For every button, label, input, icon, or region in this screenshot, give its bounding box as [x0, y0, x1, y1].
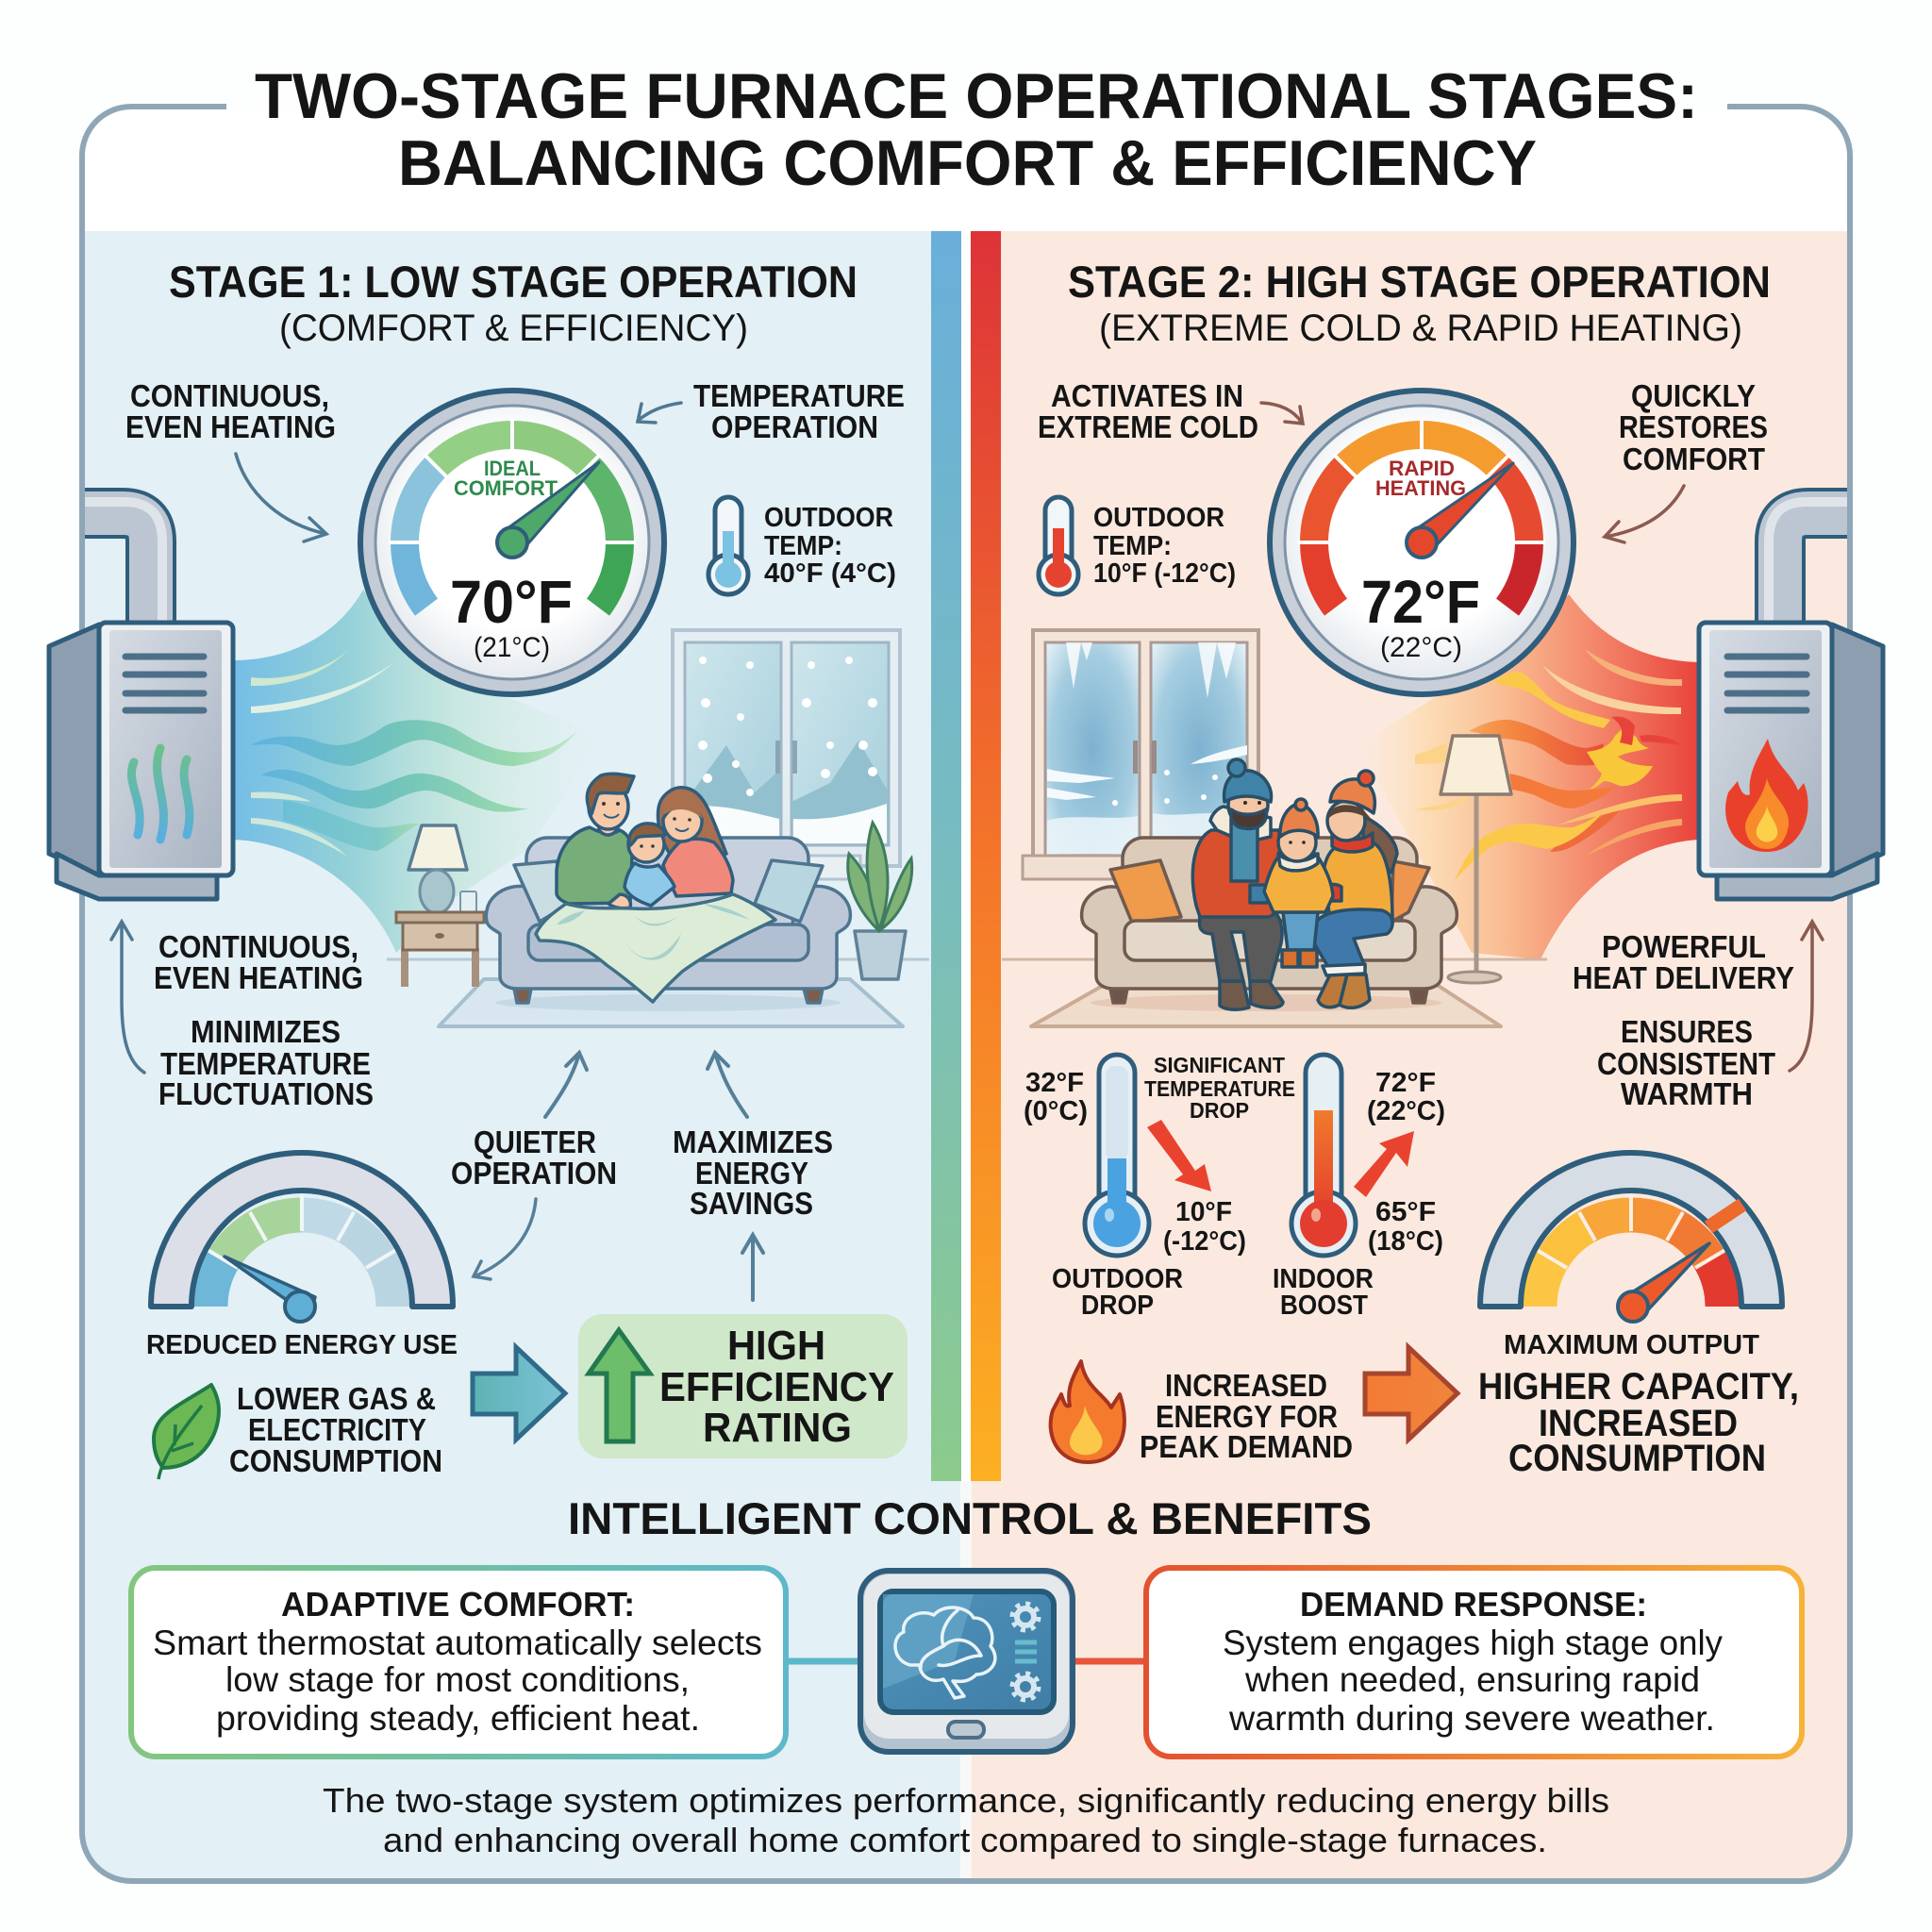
arrow to gauge from label — [236, 454, 326, 541]
connector left — [789, 1658, 858, 1664]
family left — [557, 774, 733, 908]
label: 10F: (-12°C) — [1163, 1226, 1246, 1257]
label: lower gas and electricity: CONSUMPTION — [229, 1443, 442, 1478]
high efficiency rating box: RATING — [703, 1405, 852, 1451]
high efficiency rating box: HIGH — [727, 1323, 825, 1369]
label: outdoor temp 40F: TEMP: — [764, 531, 842, 561]
comfort gauge 70F — [360, 391, 664, 694]
stage 2 heading: (EXTREME COLD & RAPID HEATING) — [1099, 308, 1742, 349]
icon: leaf — [154, 1385, 219, 1479]
thermometer outdoor drop — [1085, 1055, 1149, 1256]
high efficiency rating box: EFFICIENCY — [659, 1364, 894, 1410]
arrow quieter to room — [545, 1053, 587, 1117]
label: temperature operation — [693, 378, 905, 444]
label: higher capacity increased consumption: CONSUMPTION — [1508, 1438, 1766, 1479]
flame swirl — [1587, 717, 1682, 790]
label: maximizes energy savings — [673, 1124, 833, 1221]
panel: stage 2 high stage — [1002, 257, 1883, 1479]
label: outdoor temp 40F: 40°F (4°C) — [764, 558, 896, 589]
label: outdoor temp 10F: OUTDOOR — [1093, 503, 1224, 533]
arrow quieter to gauge — [474, 1199, 536, 1279]
stage 1 heading: STAGE 1: LOW STAGE OPERATION — [169, 257, 858, 307]
gear icons and bars — [1012, 1604, 1039, 1700]
label: lower gas and electricity — [229, 1381, 442, 1478]
connector right — [1074, 1658, 1144, 1664]
label: significant temperature drop: TEMPERATURE — [1144, 1076, 1295, 1101]
label: continuous even heating top: CONTINUOUS, — [130, 378, 329, 413]
label: significant temperature drop: DROP — [1190, 1098, 1249, 1123]
icon: smart thermostat tablet — [860, 1571, 1073, 1752]
stage 2 heading — [1068, 257, 1771, 349]
label: continuous even heating lower: CONTINUOUS, — [158, 929, 358, 964]
label: higher capacity increased consumption: HIGHER CAPACITY, — [1478, 1366, 1799, 1407]
icon: duct left — [85, 502, 162, 625]
panel: adaptive comfort: providing steady, efficient heat. — [216, 1699, 700, 1738]
comfort gauge 70F: (21°C) — [474, 632, 550, 663]
label: significant temperature drop: SIGNIFICANT — [1154, 1053, 1285, 1077]
arrow rating to savings — [742, 1235, 763, 1300]
label: outdoor temp 40F — [764, 503, 896, 589]
icon: duct right — [1769, 502, 1847, 625]
label: increased energy for peak demand — [1140, 1368, 1353, 1464]
label: maximum output: MAXIMUM OUTPUT — [1504, 1330, 1759, 1360]
energy gauge low — [151, 1153, 453, 1322]
panel: demand response: when needed, ensuring rapid — [1244, 1660, 1700, 1699]
label: significant temperature drop — [1144, 1053, 1295, 1123]
label: quickly restores comfort: RESTORES — [1619, 409, 1768, 444]
thermometer indoor boost — [1291, 1055, 1356, 1256]
label: quieter operation: OPERATION — [451, 1156, 617, 1191]
panel: adaptive comfort: Smart thermostat automatically selects — [153, 1624, 762, 1662]
comfort gauge 70F: 70°F — [450, 568, 573, 636]
plant — [848, 823, 912, 979]
comfort gauge 70F: IDEAL — [484, 457, 541, 480]
brain icon — [895, 1607, 995, 1698]
label: minimizes temperature fluctuations: TEMPERATURE — [160, 1046, 371, 1081]
label: outdoor drop — [1052, 1264, 1183, 1321]
icon: furnace right — [1699, 623, 1883, 899]
label: maximizes energy savings: ENERGY — [695, 1156, 808, 1191]
label: ensures consistent warmth: WARMTH — [1621, 1076, 1753, 1111]
title: BALANCING COMFORT & EFFICIENCY — [398, 127, 1537, 199]
label: increased energy for peak demand: PEAK DEMAND — [1140, 1429, 1353, 1464]
thermometer small outdoor — [708, 497, 748, 594]
label: activates in extreme cold — [1038, 378, 1258, 444]
label: outdoor drop: OUTDOOR — [1052, 1264, 1183, 1294]
closing summary text — [323, 1781, 1609, 1859]
label: 10F — [1163, 1197, 1246, 1257]
high efficiency rating box — [578, 1314, 908, 1458]
comfort gauge 70F: COMFORT — [454, 476, 558, 500]
label: 65F: (18°C) — [1368, 1226, 1443, 1257]
label: ensures consistent warmth — [1597, 1014, 1775, 1111]
mother in winter wear — [1313, 771, 1397, 1008]
arrow savings to room — [708, 1053, 747, 1117]
heating gauge 72F: RAPID — [1389, 457, 1455, 480]
label: 65F: 65°F — [1375, 1197, 1436, 1227]
floor and rug right — [1002, 959, 1547, 1026]
label: powerful heat delivery: POWERFUL — [1602, 929, 1766, 964]
arrow to gauge activates — [1261, 403, 1303, 424]
label: quickly restores comfort — [1619, 378, 1768, 476]
label: 10F: 10°F — [1175, 1197, 1232, 1227]
blanket — [536, 894, 775, 1002]
block arrow right — [1365, 1347, 1457, 1440]
label: 32F — [1024, 1068, 1088, 1126]
panel: adaptive comfort — [131, 1568, 786, 1757]
label: outdoor temp 10F — [1093, 503, 1236, 589]
heading: intelligent control: INTELLIGENT CONTROL & BENEFITS — [568, 1493, 1372, 1543]
label: 32F: 32°F — [1025, 1068, 1084, 1098]
label: higher capacity increased consumption — [1478, 1366, 1799, 1479]
label: maximizes energy savings: SAVINGS — [690, 1186, 813, 1221]
label: outdoor drop: DROP — [1081, 1291, 1154, 1321]
label: reduced energy use: REDUCED ENERGY USE — [146, 1330, 458, 1360]
label: quickly restores comfort: QUICKLY — [1631, 378, 1756, 413]
stage 1 heading: (COMFORT & EFFICIENCY) — [279, 308, 748, 349]
panel: stage 1 low stage — [49, 257, 929, 1479]
sofa right — [1082, 838, 1457, 1003]
label: 72F: 72°F — [1375, 1068, 1436, 1098]
label: minimizes temperature fluctuations — [158, 1014, 374, 1111]
label: higher capacity increased consumption: INCREASED — [1539, 1403, 1738, 1444]
title: TWO-STAGE FURNACE OPERATIONAL STAGES: — [255, 60, 1698, 132]
label: continuous even heating lower: EVEN HEATING — [154, 960, 363, 995]
arrow up to furnace right — [1790, 922, 1823, 1071]
arrow up to furnace — [111, 922, 144, 1073]
label: lower gas and electricity: ELECTRICITY — [248, 1412, 426, 1447]
panel: adaptive comfort: ADAPTIVE COMFORT: — [281, 1585, 635, 1624]
family right — [1192, 759, 1397, 1009]
label: increased energy for peak demand: INCREASED — [1165, 1368, 1327, 1403]
warm air flow left — [233, 590, 604, 953]
arrow to gauge restores — [1605, 486, 1684, 542]
label: indoor boost: INDOOR — [1273, 1264, 1374, 1294]
label: minimizes temperature fluctuations: MINIMIZES — [191, 1014, 341, 1049]
label: activates in extreme cold: EXTREME COLD — [1038, 409, 1258, 444]
label: powerful heat delivery — [1573, 929, 1794, 995]
label: lower gas and electricity: LOWER GAS & — [237, 1381, 436, 1416]
label: outdoor temp 40F: OUTDOOR — [764, 503, 893, 533]
icon: flame — [1051, 1361, 1124, 1462]
floor lamp — [1441, 736, 1511, 983]
title — [255, 60, 1698, 199]
panel: demand response — [1146, 1568, 1802, 1757]
closing summary text: The two-stage system optimizes performance, significantly reducing energy bills — [323, 1781, 1609, 1820]
center divider: left gradient bar — [931, 231, 961, 1481]
label: outdoor temp 10F: TEMP: — [1093, 531, 1172, 561]
label: powerful heat delivery: HEAT DELIVERY — [1573, 960, 1794, 995]
block arrow left — [473, 1347, 565, 1440]
father — [557, 774, 634, 908]
side table and lamp — [396, 825, 484, 987]
panel: demand response: warmth during severe weather. — [1228, 1699, 1715, 1738]
label: ensures consistent warmth: ENSURES — [1621, 1014, 1753, 1049]
label: ensures consistent warmth: CONSISTENT — [1597, 1046, 1775, 1081]
father in winter wear — [1192, 759, 1283, 1009]
label: 72F: (22°C) — [1367, 1096, 1445, 1126]
label: minimizes temperature fluctuations: FLUCTUATIONS — [158, 1076, 374, 1111]
hot air flow right — [1358, 594, 1698, 959]
label: temperature operation: OPERATION — [711, 409, 878, 444]
heating gauge 72F — [1270, 391, 1574, 694]
label: quickly restores comfort: COMFORT — [1623, 441, 1765, 476]
label: 72F — [1367, 1068, 1445, 1126]
panel: demand response: DEMAND RESPONSE: — [1300, 1585, 1647, 1624]
stage 1 heading — [169, 257, 858, 349]
mother — [658, 788, 733, 896]
label: continuous even heating top: EVEN HEATING — [125, 409, 336, 444]
label: continuous even heating top — [125, 378, 336, 444]
panel: demand response: System engages high stage only — [1223, 1624, 1723, 1662]
sofa left — [486, 838, 850, 1003]
floor and rug left — [387, 959, 929, 1026]
label: temperature operation: TEMPERATURE — [693, 378, 905, 413]
child — [625, 824, 675, 906]
child in winter wear — [1264, 799, 1333, 967]
label: outdoor temp 10F: 10°F (-12°C) — [1093, 558, 1236, 589]
icon: furnace left — [49, 623, 233, 899]
panel: adaptive comfort: low stage for most conditions, — [225, 1660, 690, 1699]
stage 2 heading: STAGE 2: HIGH STAGE OPERATION — [1068, 257, 1771, 307]
label: increased energy for peak demand: ENERGY FOR — [1156, 1399, 1338, 1434]
thermometer small outdoor right — [1039, 497, 1078, 594]
heating gauge 72F: 72°F — [1361, 568, 1480, 636]
label: quieter operation — [451, 1124, 617, 1191]
arrow to gauge from temperature — [638, 403, 681, 423]
energy gauge high — [1480, 1153, 1782, 1322]
closing summary text: and enhancing overall home comfort compared to single-stage furnaces. — [383, 1821, 1547, 1859]
label: maximizes energy savings: MAXIMIZES — [673, 1124, 833, 1159]
label: 32F: (0°C) — [1024, 1096, 1088, 1126]
label: quieter operation: QUIETER — [474, 1124, 596, 1159]
window right — [1023, 630, 1258, 879]
window left — [673, 630, 900, 879]
heating gauge 72F: (22°C) — [1380, 632, 1462, 663]
red arrow down — [1147, 1120, 1211, 1191]
label: activates in extreme cold: ACTIVATES IN — [1051, 378, 1243, 413]
red arrow up — [1354, 1131, 1414, 1197]
center divider: right gradient bar — [971, 231, 1001, 1481]
label: 65F — [1368, 1197, 1443, 1257]
heating gauge 72F: HEATING — [1375, 476, 1466, 500]
label: indoor boost — [1273, 1264, 1374, 1321]
label: indoor boost: BOOST — [1280, 1291, 1368, 1321]
label: continuous even heating lower — [154, 929, 363, 995]
